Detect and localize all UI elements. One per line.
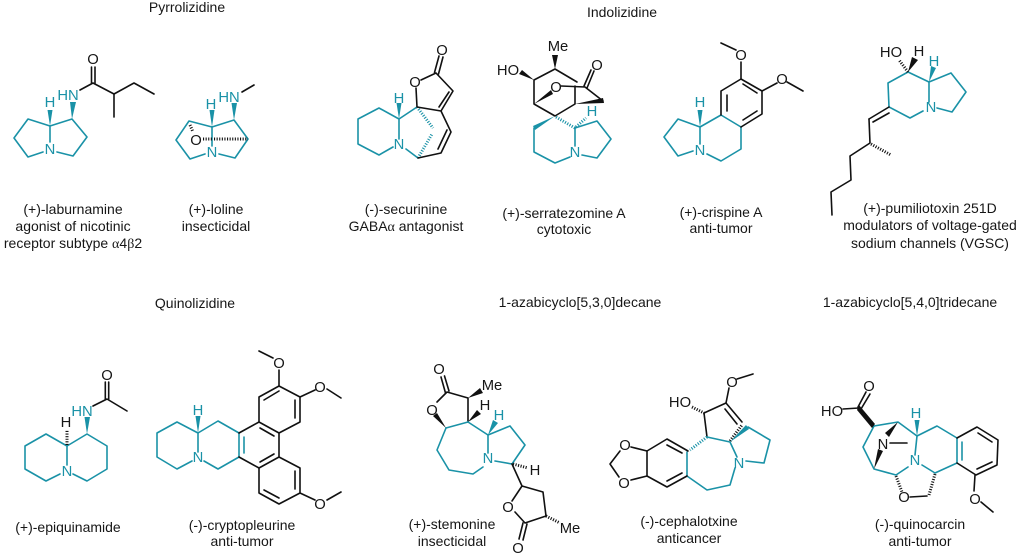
securinine structure: H xyxy=(394,91,404,107)
cephalotaxine structure xyxy=(610,374,770,492)
epiquinamide caption: (+)-epiquinamide xyxy=(15,519,121,535)
cephalotaxine structure: O xyxy=(726,375,738,391)
laburnamine caption: agonist of nicotinic xyxy=(15,218,131,234)
stemonine structure: O xyxy=(426,403,438,419)
serratezomine A caption: (+)-serratezomine A xyxy=(502,205,626,221)
crispine A structure: H xyxy=(695,95,705,111)
loline structure: N xyxy=(207,145,217,161)
stemonine structure xyxy=(426,362,580,555)
cryptopleurine structure: O xyxy=(314,497,326,513)
stemonine caption: (+)-stemonine xyxy=(409,516,495,532)
quinocarcin structure: O xyxy=(969,492,981,508)
epiquinamide structure: HN xyxy=(71,404,93,420)
cryptopleurine caption: (-)-cryptopleurine xyxy=(189,517,295,533)
serratezomine A structure: Me xyxy=(548,39,568,55)
stemonine caption: insecticidal xyxy=(418,533,486,549)
molecule: cryptopleurine xyxy=(157,351,341,549)
quinocarcin structure: O xyxy=(863,379,875,395)
crispine A structure xyxy=(664,43,803,161)
stemonine structure: H xyxy=(494,408,504,424)
pumiliotoxin 251D caption: (+)-pumiliotoxin 251D xyxy=(863,200,997,216)
serratezomine A structure: H xyxy=(587,104,597,120)
crispine A structure: O xyxy=(735,48,747,64)
securinine structure: O xyxy=(409,75,421,91)
molecule: quinocarcin xyxy=(821,379,998,549)
loline structure: O xyxy=(190,133,202,149)
quinocarcin caption: anti-tumor xyxy=(888,533,952,549)
molecule: securinine xyxy=(349,43,463,235)
cephalotaxine structure: O xyxy=(618,476,630,492)
heading: Indolizidine: Indolizidine xyxy=(587,4,657,20)
loline caption: (+)-loline xyxy=(189,201,243,217)
laburnamine structure: H xyxy=(45,95,55,111)
quinocarcin structure: H xyxy=(911,406,921,422)
pumiliotoxin 251D caption: modulators of voltage-gated xyxy=(843,217,1017,233)
quinocarcin structure: HO xyxy=(821,404,843,420)
cephalotaxine structure: HO xyxy=(669,395,691,411)
laburnamine structure: O xyxy=(87,52,99,68)
molecule: pumiliotoxin 251D xyxy=(831,44,1017,251)
serratezomine A caption: cytotoxic xyxy=(537,221,591,237)
epiquinamide structure: N xyxy=(62,464,72,480)
pumiliotoxin 251D structure xyxy=(831,44,966,215)
stemonine structure: H xyxy=(480,398,490,414)
stemonine structure: H xyxy=(530,463,540,479)
securinine caption: (-)-securinine xyxy=(365,201,447,217)
securinine structure xyxy=(358,43,453,158)
pumiliotoxin 251D structure: N xyxy=(926,100,936,116)
cephalotaxine caption: (-)-cephalotxine xyxy=(640,513,738,529)
molecule: cephalotaxine xyxy=(610,374,770,546)
cryptopleurine structure xyxy=(157,351,341,513)
pumiliotoxin 251D structure: H xyxy=(929,54,939,70)
loline structure: H xyxy=(206,97,216,113)
epiquinamide structure: O xyxy=(101,368,113,384)
crispine A structure: O xyxy=(776,72,788,88)
pumiliotoxin 251D structure: H xyxy=(914,44,924,60)
crispine A caption: (+)-crispine A xyxy=(680,204,762,220)
stemonine structure: O xyxy=(502,500,514,516)
cryptopleurine structure: O xyxy=(273,356,285,372)
molecule: loline xyxy=(176,85,254,234)
pumiliotoxin 251D caption: sodium channels (VGSC) xyxy=(851,235,1009,251)
serratezomine A structure: HO xyxy=(497,63,519,79)
laburnamine structure: N xyxy=(45,142,55,158)
quinocarcin caption: (-)-quinocarcin xyxy=(875,516,965,532)
loline structure xyxy=(176,85,254,161)
heading: 1-azabicyclo[5,4,0]tridecane: 1-azabicyclo[5,4,0]tridecane xyxy=(823,294,997,310)
quinocarcin structure: N xyxy=(878,437,888,453)
molecule: crispine A xyxy=(664,43,803,236)
laburnamine caption: receptor subtype α4β2 xyxy=(4,235,142,252)
securinine caption: GABAα antagonist xyxy=(349,218,463,235)
heading: Quinolizidine: Quinolizidine xyxy=(155,295,235,311)
cryptopleurine structure: N xyxy=(193,450,203,466)
epiquinamide structure: H xyxy=(61,415,71,431)
serratezomine A structure xyxy=(497,39,611,163)
molecule: serratezomine A xyxy=(497,39,626,237)
stemonine structure: O xyxy=(433,362,445,378)
stemonine structure: Me xyxy=(560,521,580,537)
cryptopleurine caption: anti-tumor xyxy=(210,533,274,549)
quinocarcin structure: N xyxy=(910,453,920,469)
laburnamine caption: (+)-laburnamine xyxy=(23,201,123,217)
serratezomine A structure: O xyxy=(591,58,603,74)
cephalotaxine caption: anticancer xyxy=(657,530,722,546)
cephalotaxine structure: O xyxy=(619,438,631,454)
crispine A structure: N xyxy=(695,143,705,159)
pumiliotoxin 251D structure: HO xyxy=(880,45,902,61)
laburnamine structure xyxy=(14,52,154,158)
epiquinamide structure xyxy=(25,368,127,481)
loline caption: insecticidal xyxy=(182,218,250,234)
crispine A caption: anti-tumor xyxy=(689,220,753,236)
securinine structure: O xyxy=(436,43,448,59)
loline structure: HN xyxy=(218,90,240,106)
cryptopleurine structure: H xyxy=(193,403,203,419)
serratezomine A structure: O xyxy=(550,80,562,96)
serratezomine A structure: N xyxy=(570,145,580,161)
laburnamine structure: HN xyxy=(57,88,79,104)
cryptopleurine structure: O xyxy=(314,380,326,396)
stemonine structure: N xyxy=(483,451,493,467)
securinine structure: N xyxy=(394,137,404,153)
molecule: epiquinamide xyxy=(15,368,127,535)
quinocarcin structure: O xyxy=(898,490,910,506)
quinocarcin structure xyxy=(821,379,998,512)
molecule: laburnamine xyxy=(4,52,154,252)
cephalotaxine structure: N xyxy=(734,456,744,472)
heading: 1-azabicyclo[5,3,0]decane: 1-azabicyclo[5,3,0]decane xyxy=(499,294,662,310)
molecule: stemonine xyxy=(409,362,580,555)
stemonine structure: Me xyxy=(482,378,502,394)
